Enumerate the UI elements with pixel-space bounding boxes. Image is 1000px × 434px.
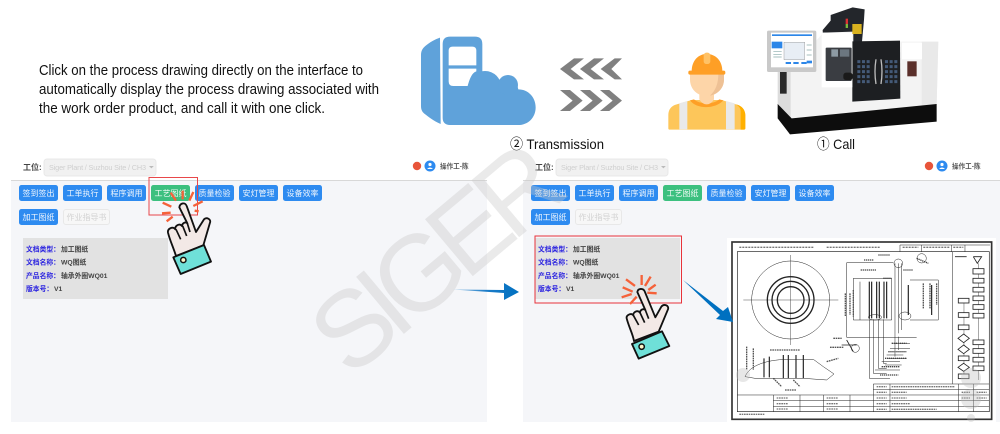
document info card: V1 [54, 286, 63, 293]
tab buttons: 设备效率 [798, 188, 830, 198]
panel: right screen [523, 159, 1000, 422]
document info card: 文档类型： [26, 244, 60, 254]
tab buttons: 安灯管理 [242, 188, 274, 198]
tab buttons: 工单执行 [578, 188, 610, 198]
workstation selector [23, 159, 156, 176]
tab buttons: 工艺图纸 [666, 188, 698, 198]
document info card [535, 238, 680, 299]
process flow chart [955, 257, 982, 263]
sub tab buttons [19, 209, 110, 225]
user status [925, 160, 981, 172]
machine door [852, 41, 900, 102]
document info card: 轴承外圈WQ01 [61, 271, 108, 280]
caption: call: ① Call [817, 136, 855, 152]
document info card: 加工图纸 [61, 244, 88, 254]
tab buttons: 签到签出 [22, 188, 54, 198]
hand [627, 289, 668, 341]
sub tab buttons [531, 209, 622, 225]
tab buttons: 质量检验 [198, 188, 230, 198]
highlight box: process drawing tab [149, 178, 198, 215]
tab buttons: 设备效率 [286, 188, 318, 198]
tab buttons [19, 185, 322, 201]
cuff [173, 245, 211, 274]
sub tab buttons: 加工图纸 [534, 212, 566, 222]
tab buttons: 工艺图纸 [154, 188, 186, 198]
machine base [778, 104, 937, 134]
watermark: SIGER [287, 118, 587, 397]
intro text: Click on the process drawing directly on the interface to [39, 63, 363, 79]
cuff [632, 331, 669, 359]
tab buttons: 程序调用 [622, 188, 654, 198]
tab buttons: 签到签出 [534, 188, 566, 198]
document info card: 产品名称： [26, 271, 60, 280]
document info card: WQ图纸 [573, 258, 598, 266]
click rays [622, 275, 657, 304]
intro text [39, 63, 379, 117]
process drawing [727, 238, 996, 423]
title block text [739, 387, 987, 414]
icon: cloud document [421, 37, 536, 125]
arrow: left to right panel [453, 283, 519, 300]
tab buttons: 安灯管理 [754, 188, 786, 198]
control panel [822, 33, 852, 87]
sub tab buttons: 作业指导书 [578, 212, 618, 222]
click rays [162, 191, 203, 221]
icon: double chevron arrows [560, 58, 622, 111]
profile detail [745, 359, 834, 380]
tab buttons: 程序调用 [110, 188, 142, 198]
section view [847, 263, 938, 340]
icon: CNC machine [767, 7, 938, 134]
hand cursor: right [622, 275, 669, 359]
machine body [790, 32, 938, 118]
drawing frames [732, 242, 992, 419]
document info card: V1 [566, 286, 575, 293]
tab buttons: 工单执行 [66, 188, 98, 198]
intro text: the work order product, and call it with one click. [39, 101, 325, 117]
tab buttons: 质量检验 [710, 188, 742, 198]
caption: transmission: ② Transmission [510, 136, 604, 152]
document info card: 文档类型： [538, 244, 572, 254]
highlight box: document info [535, 236, 682, 303]
hand [168, 203, 210, 256]
panel: left screen [11, 159, 487, 422]
title text [739, 245, 963, 249]
icon: worker [668, 53, 745, 130]
side panel [902, 43, 922, 59]
document info card: 轴承外圈WQ01 [573, 271, 620, 280]
sub tab buttons: 加工图纸 [22, 212, 54, 222]
circular part view [752, 261, 830, 339]
left side [778, 70, 791, 118]
document info card: 文档名称： [538, 258, 572, 266]
hand cursor: left [162, 191, 211, 274]
arrow: to drawing [683, 280, 733, 322]
right side shading [922, 42, 938, 107]
workstation selector: 工位: [23, 162, 42, 172]
machine column [823, 7, 865, 42]
user status: 操作工-陈 [440, 162, 469, 170]
user status: 操作工-陈 [952, 162, 981, 170]
touchscreen [767, 31, 816, 72]
sub tab buttons: 作业指导书 [66, 212, 106, 222]
user status [413, 160, 469, 172]
tab buttons [531, 185, 834, 201]
workstation selector: Siger Plant / Suzhou Site / CH3 [561, 163, 658, 172]
document info card: 版本号： [538, 284, 565, 293]
document info card: 产品名称： [538, 271, 572, 280]
intro text: automatically display the process drawing associated with [39, 82, 379, 98]
workstation selector: 工位: [535, 162, 554, 172]
zoom controls [736, 368, 981, 422]
warning label [852, 24, 862, 34]
workstation selector [535, 159, 668, 176]
document info card: 版本号： [26, 284, 53, 293]
document info card [23, 238, 168, 299]
document info card: WQ图纸 [61, 258, 86, 266]
document info card: 文档名称： [26, 258, 60, 266]
workstation selector: Siger Plant / Suzhou Site / CH3 [49, 163, 146, 172]
document info card: 加工图纸 [573, 244, 600, 254]
